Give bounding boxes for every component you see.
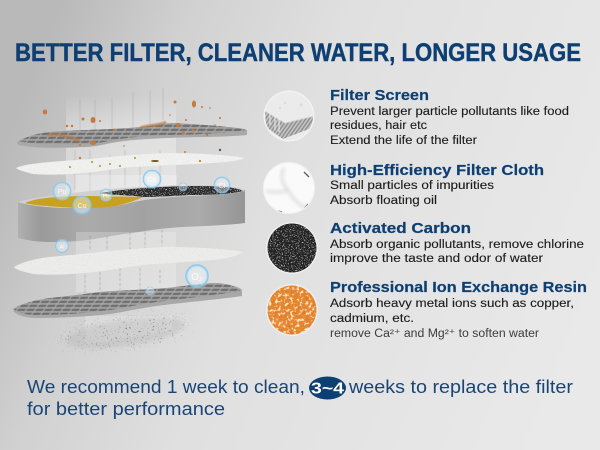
ion bubbles: Pb — [103, 194, 109, 200]
recommendation text: for better performance — [27, 399, 225, 419]
heading: filter screen: Filter Screen — [330, 88, 429, 104]
ion bubbles: Al — [60, 244, 64, 250]
ion bubbles: Ca — [148, 177, 157, 184]
black activated carbon — [100, 186, 243, 197]
ion bubbles: Cu — [78, 203, 87, 210]
text: resin description: remove Ca²⁺ and Mg²⁺ to soften water — [330, 328, 539, 340]
text: filter cloth description: Small particles of impurities — [330, 180, 494, 192]
text: resin description: Adsorb heavy metal ions such as copper, — [330, 298, 574, 310]
recommendation text: weeks to replace the filter — [348, 377, 573, 397]
heading: high-efficiency filter cloth: High-Efficiency Filter Cloth — [330, 163, 544, 179]
lower filter cloth layer — [14, 247, 243, 275]
text: activated carbon description — [330, 239, 584, 265]
ion bubbles: O₂ — [191, 272, 203, 283]
recommendation text — [27, 376, 573, 419]
text: activated carbon description: improve the taste and odor of water — [330, 253, 543, 265]
recommendation text: We recommend 1 week to clean, — [27, 377, 305, 397]
text: resin description — [330, 298, 574, 340]
bottom filter screen layer — [13, 283, 242, 318]
ion bubbles: Pb — [58, 189, 66, 196]
ion bubbles: Cl — [219, 183, 226, 190]
water streams above the filter — [66, 88, 176, 200]
text: filter cloth description: Absorb floating oil — [330, 195, 437, 207]
text: activated carbon description: Absorb organic pollutants, remove chlorine — [330, 239, 584, 251]
text: filter screen description: residues, hair etc — [330, 120, 427, 132]
text: filter screen description — [330, 106, 569, 147]
text: filter screen description: Prevent larger particle pollutants like food — [330, 106, 569, 118]
falling impurities — [57, 307, 193, 357]
icon: filter screen — [264, 90, 314, 142]
text: filter screen description: Extend the life of the filter — [330, 135, 477, 147]
ion bubbles — [52, 170, 230, 296]
gold ion exchange resin — [25, 196, 143, 208]
text: resin description: cadmium, etc. — [330, 313, 414, 325]
badge: 3~4 — [309, 376, 346, 400]
streams between cloth and container — [75, 175, 177, 212]
heading: professional ion exchange resin: Professional Ion Exchange Resin — [330, 280, 587, 296]
icon: activated carbon — [266, 222, 318, 274]
text: filter cloth description — [330, 180, 494, 207]
filter container with media — [18, 185, 245, 242]
upper filter cloth layer — [16, 149, 245, 175]
icon: ion exchange resin — [266, 284, 318, 336]
top filter screen layer — [17, 122, 247, 148]
filter layers illustration — [13, 88, 247, 357]
badge: 3~4: 3~4 — [311, 380, 344, 398]
icon: cotton filter cloth — [263, 162, 315, 214]
heading: activated carbon: Activated Carbon — [330, 221, 471, 237]
streams below container — [76, 230, 176, 295]
food debris particles — [43, 100, 225, 147]
